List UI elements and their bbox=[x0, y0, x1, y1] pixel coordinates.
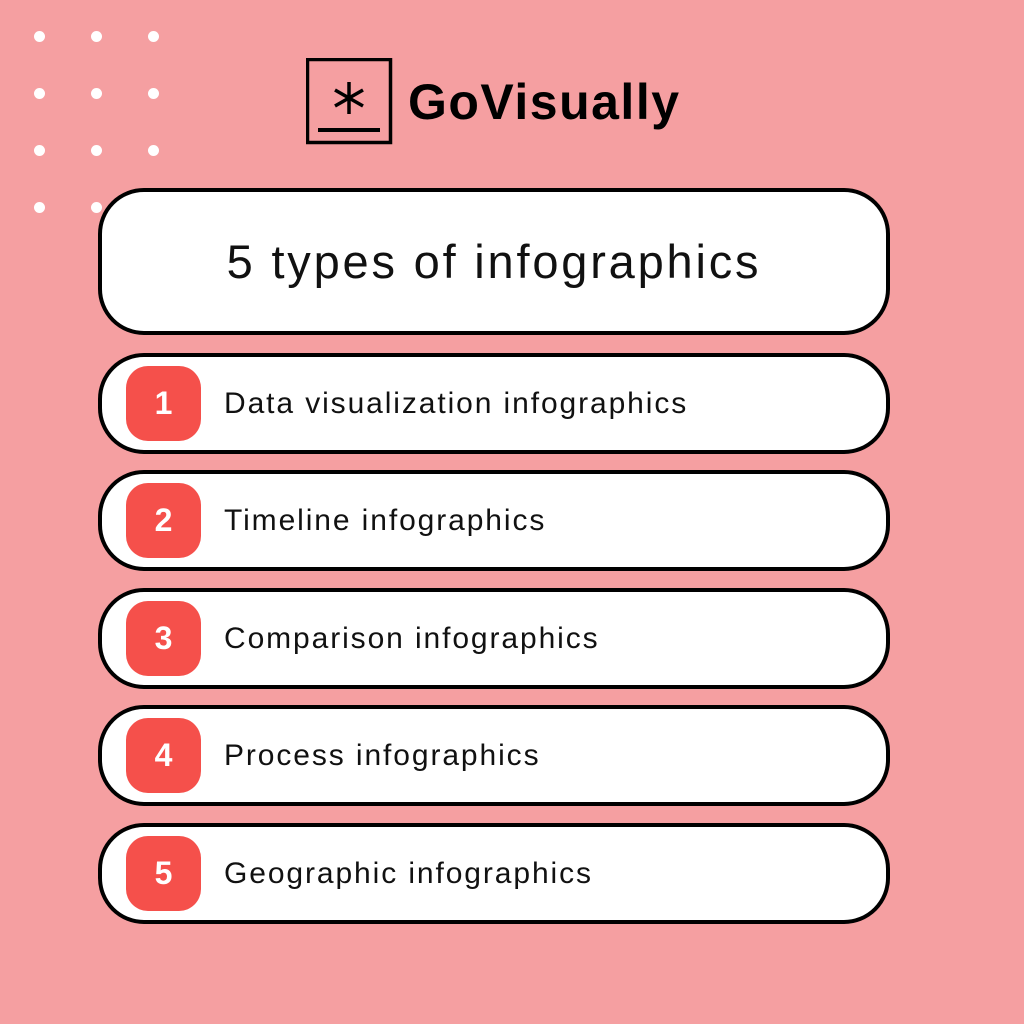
logo bbox=[306, 58, 681, 144]
item 4: Process infographics bbox=[224, 739, 540, 772]
item 5: 5 bbox=[155, 855, 172, 891]
icon: logo box bbox=[306, 58, 392, 144]
decorative dot grid bbox=[34, 31, 159, 213]
item 5: Geographic infographics bbox=[224, 857, 593, 890]
item 3 bbox=[98, 588, 890, 689]
item 2: 2 bbox=[155, 502, 172, 538]
item 1 bbox=[98, 353, 890, 454]
item 2 bbox=[98, 470, 890, 571]
item 5 bbox=[98, 823, 890, 924]
item 1: Data visualization infographics bbox=[224, 387, 688, 420]
item 1: 1 bbox=[155, 385, 172, 421]
title panel: 5 types of infographics bbox=[227, 235, 761, 288]
item 4: 4 bbox=[155, 737, 172, 773]
item 4 bbox=[98, 705, 890, 806]
title panel bbox=[98, 188, 890, 335]
item 3: Comparison infographics bbox=[224, 622, 600, 655]
logo text: GoVisually bbox=[408, 74, 681, 130]
item 3: 3 bbox=[155, 620, 172, 656]
item 2: Timeline infographics bbox=[224, 504, 546, 537]
